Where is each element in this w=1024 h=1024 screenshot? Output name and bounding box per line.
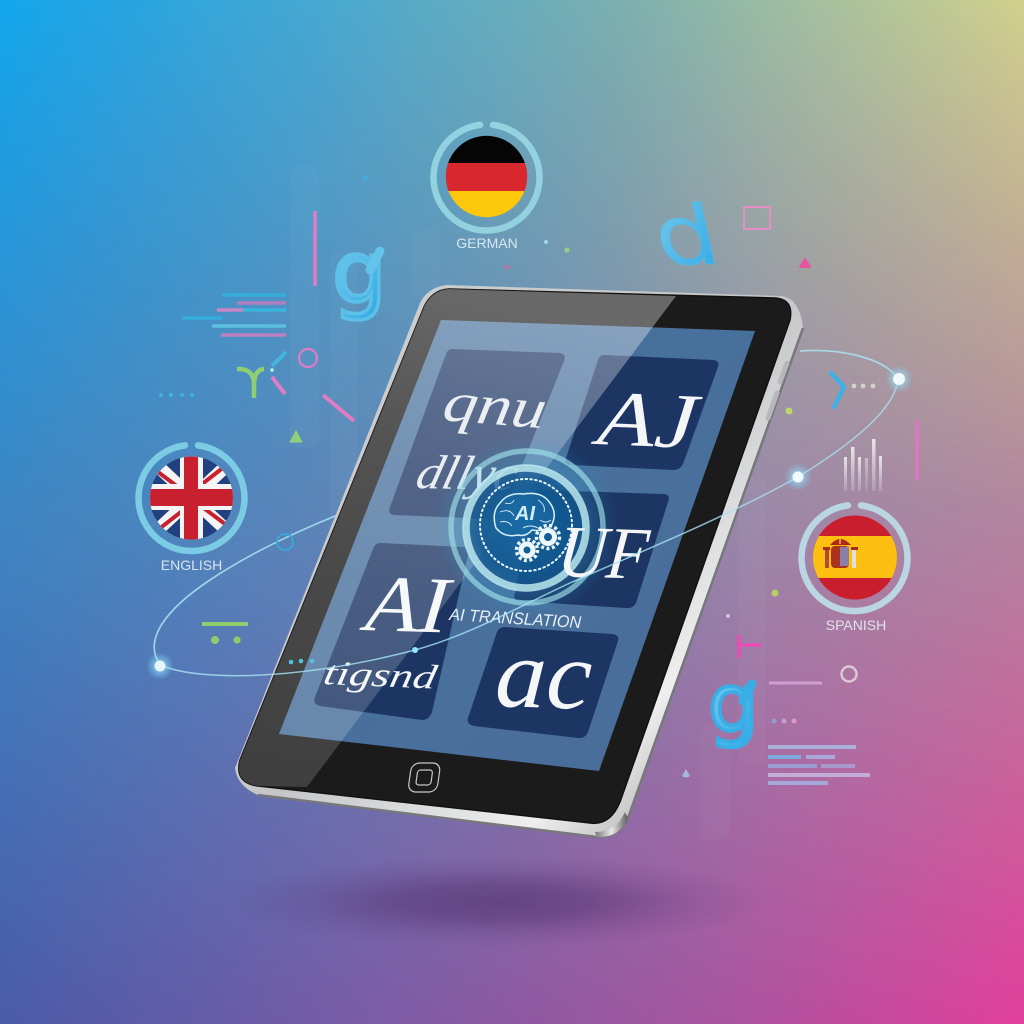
blue ring left <box>277 534 293 550</box>
decorative glyphs and marks <box>159 176 917 783</box>
orbit nodes <box>146 365 913 680</box>
glyphs tile 3: UF <box>554 511 653 596</box>
ring <box>433 125 540 230</box>
caption: AI TRANSLATION <box>448 605 582 632</box>
small drop <box>682 769 690 778</box>
pink T mark <box>739 635 761 658</box>
lower right dots <box>772 718 796 724</box>
icon: letter d upper right: d <box>644 188 728 284</box>
frame outer bevel <box>258 328 803 837</box>
label: GERMAN <box>456 235 518 251</box>
blue dots left <box>159 393 194 397</box>
orbit line in front of tablet <box>160 379 898 676</box>
pink triangle <box>800 259 810 267</box>
ring <box>802 505 908 611</box>
inner ring <box>466 468 586 588</box>
icon: gears <box>516 526 560 560</box>
icon: letter y green <box>237 369 264 398</box>
green triangle <box>290 431 302 442</box>
glyphs tile 4 <box>320 560 457 696</box>
outer ring <box>451 451 603 603</box>
screen glare <box>239 289 676 787</box>
glyphs tile 1: dllyc <box>411 446 525 501</box>
glyphs tile 5: ac <box>493 620 595 731</box>
lens glow <box>435 435 619 619</box>
glyphs tile 1: qnu <box>439 371 552 441</box>
dots right <box>852 384 875 388</box>
light ring lower right <box>842 666 856 682</box>
label: ENGLISH <box>161 557 222 573</box>
badge: German flag <box>433 125 540 251</box>
glyphs tile 4: tigsnd <box>320 654 441 696</box>
bar chart right <box>844 439 882 491</box>
crest <box>823 539 858 568</box>
pink vertical line right <box>915 420 919 480</box>
chevron right <box>831 373 844 407</box>
icon: letter g upper left: g <box>332 223 387 323</box>
lower right lines <box>768 683 870 783</box>
tablet <box>235 285 803 837</box>
flag <box>813 516 897 600</box>
tablet black face <box>239 289 791 823</box>
pink marks left <box>272 211 354 421</box>
side buttons <box>768 363 787 418</box>
small dot left <box>270 368 274 372</box>
green bar and dots <box>202 622 248 644</box>
scattered dots <box>362 176 792 618</box>
app tiles <box>314 349 718 738</box>
flag <box>445 135 529 219</box>
glyphs tile 4: AI <box>357 560 457 651</box>
ring <box>138 445 244 551</box>
ground shadow <box>227 856 767 948</box>
pink square <box>744 207 770 229</box>
screen <box>279 320 755 771</box>
dotted ring <box>480 479 572 571</box>
icon: letter g lower right: g <box>708 657 759 750</box>
glyphs tile 2: AJ <box>588 374 705 465</box>
faint background pills <box>290 165 766 840</box>
frame corner highlight <box>595 812 628 837</box>
AI translation lens <box>435 435 619 632</box>
AI in brain: AI <box>514 503 535 525</box>
tablet silver frame <box>235 285 803 837</box>
cyan dots on tablet edge <box>289 659 314 664</box>
label: SPANISH <box>826 617 886 633</box>
badge: Spanish flag <box>802 505 908 633</box>
icon: brain <box>494 493 554 536</box>
left data lines <box>182 295 286 335</box>
tile glyphs <box>320 371 705 731</box>
blue tick left <box>272 352 286 366</box>
glyphs tile 1 <box>411 371 552 501</box>
lens disc <box>464 466 588 590</box>
flag <box>150 456 233 540</box>
orbit line behind tablet <box>154 350 898 665</box>
home button <box>408 763 441 792</box>
badge: English flag <box>138 445 244 573</box>
